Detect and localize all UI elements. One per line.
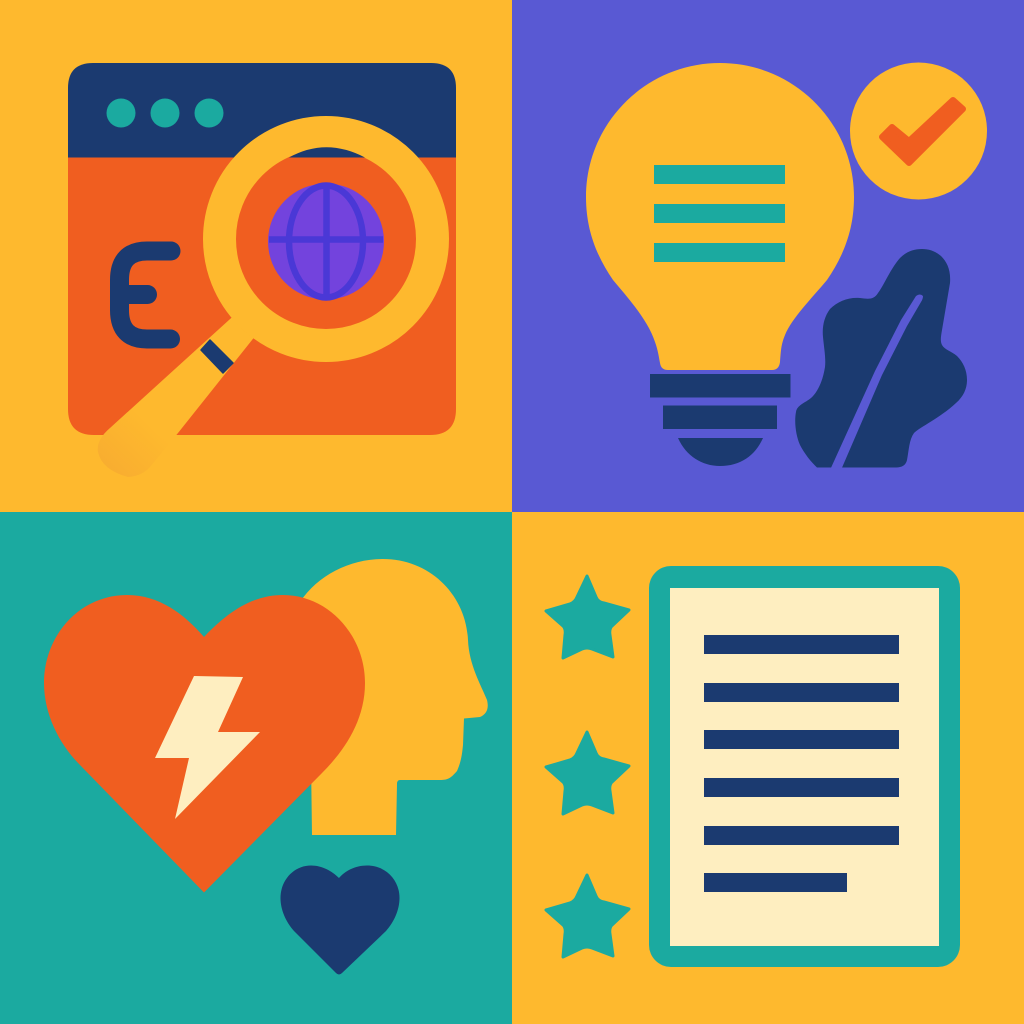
bulb base xyxy=(650,374,790,466)
globe xyxy=(268,184,384,300)
document frame xyxy=(649,566,960,967)
large heart xyxy=(44,595,365,892)
head silhouette xyxy=(300,559,488,835)
check badge xyxy=(850,62,987,200)
navy sliver in lens xyxy=(289,147,365,158)
magnifier ring xyxy=(220,132,432,346)
panel: web search xyxy=(0,0,512,512)
browser title bar xyxy=(68,63,456,158)
document text lines xyxy=(704,635,899,892)
browser window body xyxy=(68,150,456,435)
lightning bolt xyxy=(155,676,260,819)
panel: heart and mind xyxy=(0,512,512,1024)
panel: reviewed document xyxy=(512,512,1024,1024)
bulb text lines xyxy=(654,165,785,262)
leaf vein xyxy=(830,294,923,470)
leaf xyxy=(795,249,967,470)
panel: idea xyxy=(512,0,1024,512)
small heart xyxy=(280,866,400,974)
letter E xyxy=(120,251,171,339)
magnifier handle xyxy=(98,310,260,477)
stars xyxy=(546,576,629,957)
light bulb xyxy=(586,63,854,370)
magnifier collar xyxy=(201,340,233,373)
document page xyxy=(670,588,939,946)
browser dots xyxy=(106,98,224,128)
